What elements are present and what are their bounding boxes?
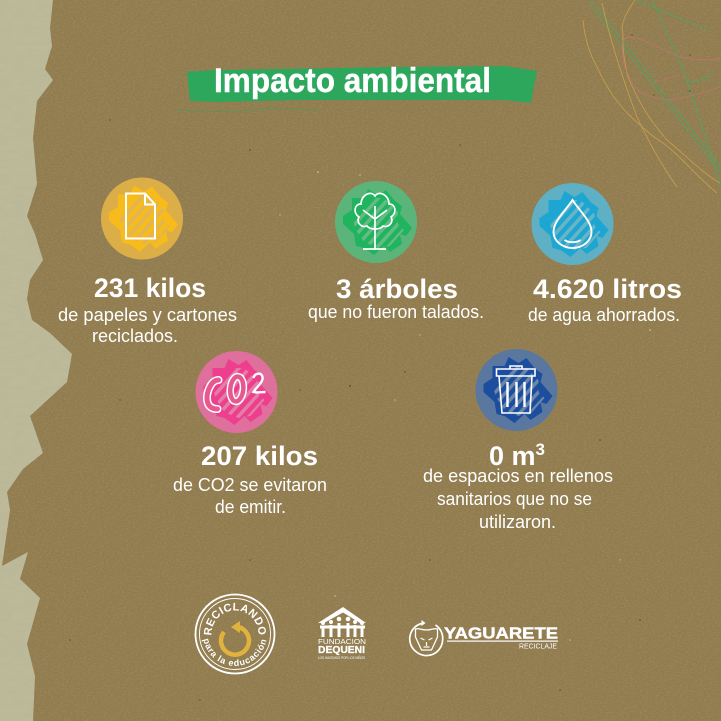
description: de papeles y cartones <box>58 305 237 325</box>
description: utilizaron. <box>479 512 556 532</box>
logo: Reciclando para la educación: RECICLANDO <box>204 602 266 635</box>
icon: document <box>101 178 183 260</box>
title banner <box>177 62 537 112</box>
logo: Yaguareté Reciclaje: RECICLAJE <box>519 644 557 650</box>
stat: landfill <box>423 349 613 532</box>
value: 207 kilos <box>201 441 318 471</box>
value: 3 <box>536 440 545 459</box>
logo: Reciclando para la educación: para la educación <box>202 638 266 666</box>
stat: CO2 <box>173 351 327 517</box>
icon: yellow refresh arrow <box>221 621 249 655</box>
logo: Reciclando para la educación <box>194 594 276 674</box>
icon: water drop <box>532 183 614 265</box>
value: 4.620 litros <box>533 274 682 304</box>
value: 231 kilos <box>94 273 206 303</box>
value: 0 m <box>489 441 536 471</box>
logo: Fundación Dequení <box>318 607 366 660</box>
description: de agua ahorrados. <box>528 305 680 325</box>
logo: Fundación Dequení: FUNDACION <box>318 639 366 646</box>
icon: jaguar in circular arrow <box>410 620 443 656</box>
decorative coloured lines top right <box>583 0 721 193</box>
icon: trash can <box>476 349 558 431</box>
value: 3 árboles <box>336 274 458 304</box>
stat: water <box>528 183 682 325</box>
icon: CO2 <box>196 351 278 433</box>
description: reciclados. <box>92 326 178 346</box>
logo: Fundación Dequení: DEQUENI <box>318 644 365 656</box>
stat: trees <box>308 181 484 322</box>
title: Impacto ambiental <box>214 62 491 100</box>
logo: Yaguareté Reciclaje: YAGUARETE <box>444 626 558 642</box>
logo: Fundación Dequení: LOS HACEMOS POR LOS NIÑOS <box>318 655 365 660</box>
logo: Yaguareté Reciclaje <box>410 620 558 656</box>
description: de emitir. <box>215 497 286 517</box>
description: que no fueron talados. <box>308 302 484 322</box>
icon: tree <box>335 181 417 263</box>
description: de espacios en rellenos <box>423 466 613 486</box>
description: de CO2 se evitaron <box>173 475 327 495</box>
description: sanitarios que no se <box>437 489 592 509</box>
stat: paper recycled <box>58 178 237 346</box>
torn paper edge <box>0 0 80 721</box>
